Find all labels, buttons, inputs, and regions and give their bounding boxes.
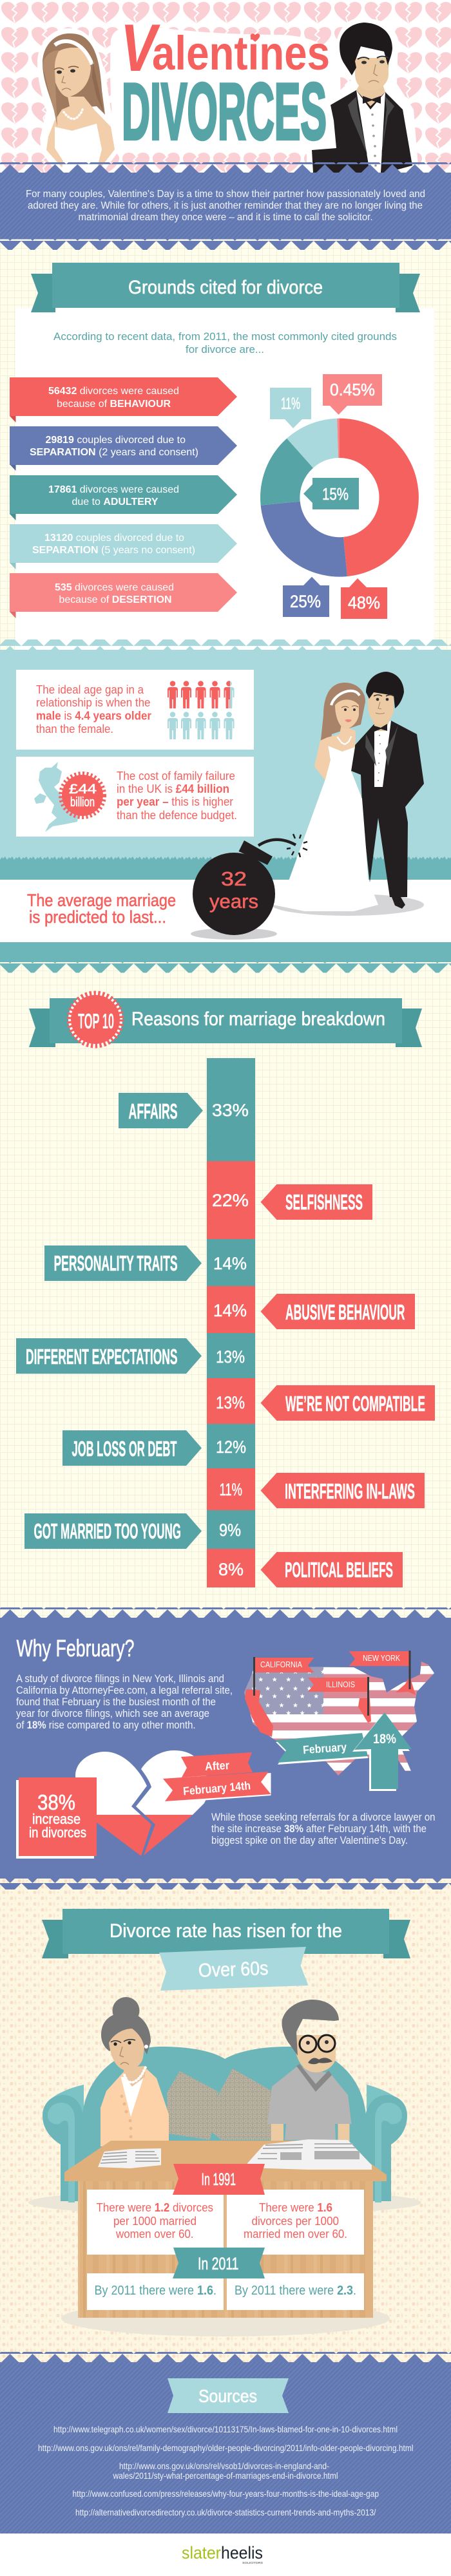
bar chart: reasons for marriage breakdown (207, 1058, 255, 1587)
callout: 38% increase (16, 1777, 97, 1859)
illustration: sofa (43, 2047, 407, 2202)
cushion left (167, 2071, 218, 2140)
ribbon: in 1991: In 1991 (201, 2170, 236, 2189)
text: average marriage: is predicted to last... (29, 907, 166, 927)
state: New York (396, 1676, 416, 1695)
label: affairs (119, 1093, 203, 1128)
text: study of divorce filings: year for divorce filings, which see an average (16, 1707, 209, 1719)
heading ribbon: over 60s (42, 1909, 410, 1991)
section: grid paper background (0, 962, 451, 1625)
ribbon: sources (168, 2378, 289, 2413)
ribbon: in 2011 (173, 2248, 265, 2278)
label: abusive behaviour (260, 1294, 415, 1329)
state: Illinois (358, 1698, 371, 1723)
shadow under table (61, 2300, 390, 2336)
cost text: per year – this is higher (117, 795, 233, 808)
logo: slater heelis: heelis (221, 2543, 263, 2562)
panel: 1991 women: per 1000 married (113, 2215, 197, 2228)
heading ribbon: top 10 reasons (29, 992, 422, 1047)
arrow: 18% up (352, 1712, 412, 1791)
section: light teal marriage facts (0, 639, 451, 962)
arrow: adultery: 17861 divorces were caused (48, 484, 179, 495)
pictogram: people (168, 681, 235, 739)
text: study of divorce filings: found that February is the busiest month of the (16, 1696, 216, 1708)
segment: selfishness: 22% (212, 1191, 249, 1210)
arrow: adultery: due to ADULTERY (72, 497, 158, 507)
small open book (98, 2148, 161, 2168)
panel: 2011 women (87, 2273, 224, 2310)
illustration: unhappy groom (307, 18, 419, 174)
segment: too young (207, 1510, 255, 1549)
label: selfishness (260, 1184, 372, 1220)
panel: 2011 men (227, 2273, 364, 2310)
segment: abusive behaviour (207, 1286, 255, 1333)
badge: 44 billion: billion (70, 795, 95, 810)
panel: 1991 women: women over 60. (115, 2228, 193, 2240)
text: study of divorce filings: of 18% rise compared to any other month. (16, 1719, 196, 1731)
label: job loss or debt: JOB LOSS OR DEBT (72, 1437, 177, 1461)
segment: too young: 9% (219, 1520, 241, 1540)
title (120, 11, 330, 156)
label: got married too young: GOT MARRIED TOO YOUNG (34, 1519, 181, 1543)
ribbon: February: February (302, 1741, 347, 1756)
segment: selfishness (207, 1161, 255, 1239)
illustration: US flag map (238, 1651, 438, 1791)
illustration: older woman (101, 1997, 169, 2146)
age gap text: The ideal age gap in a (36, 683, 144, 696)
label: not compatible (260, 1385, 435, 1421)
ribbon: after February 14th: After (205, 1759, 229, 1773)
panel: 1991 men (227, 2190, 364, 2255)
segment: affairs: 33% (212, 1101, 249, 1120)
label: personality traits (44, 1245, 202, 1281)
arrow: separation 2 years: 29819 couples divorced due to (45, 435, 186, 446)
age gap text: relationship is when the (36, 696, 151, 709)
flag: Illinois: ILLINOIS (326, 1680, 355, 1689)
sub ribbon: Over 60s (198, 1958, 269, 1982)
title: V (120, 11, 160, 86)
panel: 1991 women: There were 1.2 divorces (97, 2201, 213, 2214)
callout: 11% (270, 388, 311, 428)
illustration: bomb with 32 years: years (209, 890, 258, 913)
section: why february background (0, 1607, 451, 1879)
section: sources (0, 2352, 451, 2533)
segment: personality traits: 14% (213, 1254, 247, 1273)
logo: slater heelis: SOLICITORS (242, 2561, 263, 2564)
flag: New York: NEW YORK (363, 1653, 400, 1663)
panel: 1991 women (87, 2190, 224, 2255)
panel: 1991 men: married men over 60. (244, 2228, 347, 2240)
text: referrals increase (211, 1811, 436, 1846)
arrow: separation 5 years: 13120 couples divorced due to (44, 533, 184, 544)
cushion right (204, 2069, 272, 2140)
segment: political beliefs: 8% (218, 1560, 244, 1579)
illustration: bomb with 32 years: 32 (221, 867, 247, 890)
arrow: separation 2 years (10, 426, 237, 471)
illustration: unhappy bride (37, 28, 120, 173)
badge: top 10: TOP 10 (78, 1009, 114, 1033)
label: affairs: AFFAIRS (129, 1099, 178, 1123)
logo: slater heelis (182, 2543, 263, 2564)
cost text: in the UK is £44 billion (117, 782, 229, 795)
segment: in-laws: 11% (219, 1480, 242, 1499)
callout: 25% (283, 577, 329, 617)
state: California (245, 1689, 273, 1737)
callout: 48% (341, 578, 387, 619)
text: study of divorce filings: California by AttorneyFee.com, a legal referral site, (16, 1684, 233, 1696)
badge: 44 billion (61, 773, 104, 817)
intro sentence (53, 330, 397, 355)
age gap text: than the female. (36, 723, 113, 735)
illustration: wedding couple (272, 672, 424, 916)
label: different expectations: DIFFERENT EXPECTATIONS (26, 1345, 178, 1368)
arrow: adultery (10, 475, 237, 520)
cost text: The cost of family failure (117, 770, 235, 782)
age gap text: male is 4.4 years older (36, 710, 151, 723)
segment: not compatible: 13% (216, 1393, 245, 1412)
callout: 15% (303, 478, 359, 509)
callout: 15%: 15% (322, 484, 349, 504)
arrow: desertion: 535 divorces were caused (55, 582, 174, 593)
arrow: behaviour (10, 377, 237, 422)
arrow: behaviour: 56432 divorces were caused (48, 386, 179, 397)
age gap text (36, 683, 151, 735)
heading ribbon: over 60s: Divorce rate has risen for the (110, 1920, 342, 1942)
arrow: 18% up: 18% (373, 1732, 396, 1747)
shadow under sofa (28, 2190, 421, 2215)
ribbon: sources: Sources (198, 2386, 257, 2406)
ribbon: in 2011: In 2011 (198, 2254, 238, 2273)
source links: http://www.confused.com/press/releases/why-four-years-four-months-is-the-ideal-age-gap (72, 2488, 379, 2499)
callout: 0.45%: 0.45% (330, 380, 375, 399)
label: job loss or debt (62, 1430, 202, 1466)
intro text (26, 189, 425, 223)
segment: not compatible (207, 1378, 255, 1424)
text: study of divorce filings: A study of divorce filings in New York, Illinois and (16, 1672, 224, 1685)
source links: wales/2011/sty-what-percentage-of-marriages-end-in-divorce.html (113, 2470, 338, 2481)
label: selfishness: SELFISHNESS (285, 1190, 363, 1214)
text: referrals increase: the site increase 38% after February 14th, with the (211, 1823, 427, 1835)
flag: Illinois (308, 1677, 369, 1716)
segment: job loss (207, 1424, 255, 1468)
panel: 2011 men: By 2011 there were 2.3. (235, 2284, 356, 2298)
badge: top 10 (68, 992, 122, 1046)
ribbon: after February 14th: February 14th (182, 1779, 251, 1797)
source links: http://alternativedivorcedirectory.co.uk/divorce-statistics-current-trends-and-myths-2013/ (75, 2507, 376, 2517)
heading ribbon: Grounds cited for divorce (128, 277, 323, 298)
zigzag edge (0, 1879, 451, 1889)
heading ribbon (31, 263, 420, 312)
flag: New York (349, 1651, 411, 1689)
section: grid paper background (0, 239, 451, 651)
large open book (247, 2139, 372, 2170)
label: got married too young (24, 1513, 202, 1549)
intro band (0, 162, 451, 250)
intro text: adored they are. While for others, it is just another reminder that they are no longer living the (28, 200, 423, 211)
segment: different expectations (207, 1333, 255, 1378)
callout: 11%: 11% (281, 395, 300, 413)
footer (0, 2533, 451, 2576)
heading: why february: Why February? (17, 1635, 134, 1662)
panel: 1991 men: divorces per 1000 (251, 2215, 339, 2228)
arrow: behaviour: because of BEHAVIOUR (57, 399, 171, 410)
segment: affairs (207, 1058, 255, 1161)
flag: California (253, 1657, 314, 1696)
segment: job loss: 12% (216, 1437, 246, 1457)
label: interfering in-laws (260, 1473, 425, 1508)
cost text: than the defence budget. (117, 809, 237, 822)
icon: UK map (34, 762, 79, 832)
arrow: separation 5 years: SEPARATION (5 years no consent) (32, 545, 195, 556)
text: average marriage (27, 891, 176, 927)
segment: different expectations: 13% (216, 1347, 245, 1367)
ribbon: February (276, 1733, 368, 1765)
segment: personality traits (207, 1239, 255, 1286)
segment: in-laws (207, 1468, 255, 1510)
source links: http://www.telegraph.co.uk/women/sex/divorce/10113175/In-laws-blamed-for-one-in-10-divorces.html (53, 2424, 398, 2434)
sub ribbon (159, 1947, 308, 1991)
source links (38, 2424, 414, 2517)
label: different expectations (16, 1338, 202, 1374)
text: average marriage: The average marriage (27, 891, 176, 910)
panel: cost of family failure (16, 757, 254, 837)
header background with broken hearts (0, 0, 451, 174)
intro text: For many couples, Valentine's Day is a time to show their partner how passionately loved and (26, 189, 425, 200)
panel: ideal age gap (16, 670, 254, 750)
illustration: table (64, 2139, 387, 2318)
flag: California: CALIFORNIA (260, 1660, 302, 1669)
segment: political beliefs (207, 1549, 255, 1587)
text: referrals increase: biggest spike on the day after Valentine's Day. (211, 1834, 408, 1846)
cost text (117, 770, 237, 822)
zigzag edge (0, 962, 451, 972)
panel: 1991 men: There were 1.6 (259, 2201, 332, 2214)
segment: abusive behaviour: 14% (213, 1301, 247, 1320)
arrow: separation 2 years: SEPARATION (2 years and consent) (30, 447, 198, 458)
donut chart (260, 419, 419, 577)
arrow: desertion: because of DESERTION (59, 594, 171, 605)
arrow: desertion (10, 573, 237, 618)
callout: 38% increase: in divorces (29, 1824, 86, 1841)
callout: 0.45% (323, 374, 382, 415)
panel: grounds cited for divorce (10, 263, 434, 650)
illustration: broken heart (75, 1750, 208, 1856)
text: study of divorce filings (16, 1672, 233, 1731)
callout: 48%: 48% (348, 593, 380, 612)
callout: 38% increase: 38% (37, 1790, 75, 1814)
badge: 44 billion: £44 (69, 782, 97, 797)
ribbon: after February 14th (163, 1752, 271, 1803)
illustration: older man (267, 2000, 352, 2143)
arrow: separation 5 years (10, 524, 237, 569)
source links: http://www.ons.gov.uk/ons/rel/vsob1/divorces-in-england-and- (119, 2461, 329, 2471)
label: personality traits: PERSONALITY TRAITS (54, 1251, 178, 1275)
ribbon: in 1991 (173, 2164, 265, 2195)
title: alentines (152, 26, 330, 80)
heading ribbon: top 10 reasons: Reasons for marriage breakdown (131, 1009, 385, 1030)
panel: 2011 women: By 2011 there were 1.6. (94, 2284, 216, 2298)
callout: 25%: 25% (290, 592, 321, 611)
intro sentence: for divorce are... (186, 343, 264, 355)
callout: 38% increase: increase (32, 1811, 81, 1827)
section: damask background (0, 1879, 451, 2363)
label: political beliefs (260, 1552, 403, 1587)
intro text: matrimonial dream they once were – and it is time to call the solicitor. (79, 212, 372, 223)
illustration: bomb with 32 years (191, 834, 307, 940)
logo: slater heelis: slater (182, 2543, 221, 2562)
intro sentence: According to recent data, from 2011, the most commonly cited grounds (53, 330, 397, 343)
